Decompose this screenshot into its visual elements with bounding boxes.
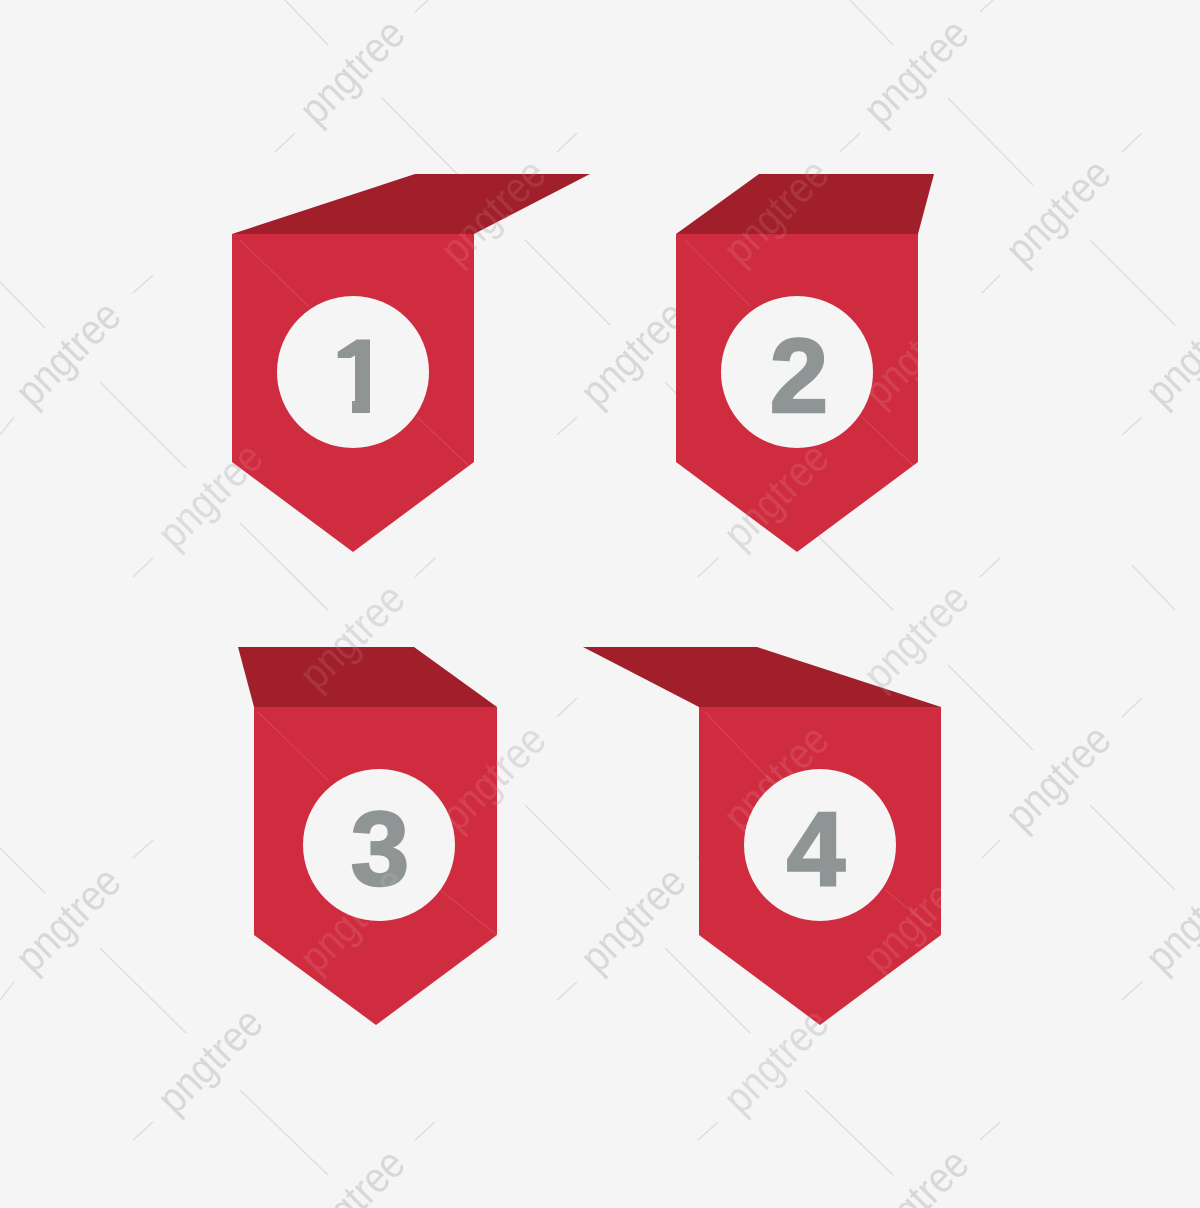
ribbon 4 circle: [744, 769, 896, 921]
watermark text: pngtree: [6, 858, 131, 982]
watermark text: pngtree: [854, 575, 979, 699]
ribbon 2: [676, 174, 934, 552]
watermark overlay on ribbons: pngtree: [290, 575, 415, 699]
ribbon 3: [238, 647, 497, 1025]
watermark text: pngtree: [996, 716, 1121, 840]
watermark text: pngtree: [996, 150, 1121, 274]
watermark overlay on ribbons: pngtree: [854, 292, 979, 416]
ribbon 2 body: [676, 234, 918, 552]
watermark overlay on ribbons: [148, 150, 979, 1123]
number 1: 1: [332, 319, 390, 436]
ribbon 1 circle: [277, 296, 429, 448]
watermark overlay on ribbons: pngtree: [714, 434, 839, 558]
watermark text: pngtree: [431, 716, 556, 840]
watermark overlay on ribbons: pngtree: [854, 575, 979, 699]
watermark text: pngtree: [148, 434, 273, 558]
ribbon 1: [232, 174, 590, 552]
watermark overlay on ribbons: pngtree: [714, 999, 839, 1123]
ribbon 1 fold: [232, 174, 590, 234]
watermark overlay on ribbons: pngtree: [148, 434, 273, 558]
watermark text: pngtree: [714, 999, 839, 1123]
number 3: 3: [351, 791, 409, 908]
watermark text: pngtree: [714, 150, 839, 274]
watermark text: pngtree: [290, 10, 415, 134]
watermark overlay on ribbons: pngtree: [714, 150, 839, 274]
ribbon 2 circle: [721, 296, 873, 448]
number 4: 4: [787, 791, 845, 908]
watermark text: pngtree: [714, 434, 839, 558]
watermark text: pngtree: [571, 292, 696, 416]
number 2: 2: [770, 318, 828, 435]
watermark overlay on ribbons: pngtree: [290, 858, 415, 982]
ribbon 2 fold: [676, 174, 934, 234]
watermark text: pngtree: [854, 10, 979, 134]
watermark text: pngtree: [571, 858, 696, 982]
watermark text: pngtree: [714, 716, 839, 840]
watermark text: pngtree: [290, 575, 415, 699]
watermark text: pngtree: [431, 150, 556, 274]
ribbon 4 fold: [583, 647, 941, 707]
watermark overlay on ribbons: pngtree: [854, 858, 979, 982]
ribbon 4: [583, 647, 941, 1025]
watermark overlay on ribbons: pngtree: [431, 716, 556, 840]
ribbon 3 fold: [238, 647, 497, 707]
ribbon 3 body: [254, 707, 497, 1025]
ribbon 3 circle: [303, 769, 455, 921]
watermark overlay on ribbons: pngtree: [714, 716, 839, 840]
watermark text: pngtree: [148, 999, 273, 1123]
ribbon 1 body: [232, 234, 474, 552]
watermark overlay on ribbons: pngtree: [431, 150, 556, 274]
watermark text: pngtree: [6, 292, 131, 416]
ribbon 4 body: [699, 707, 941, 1025]
